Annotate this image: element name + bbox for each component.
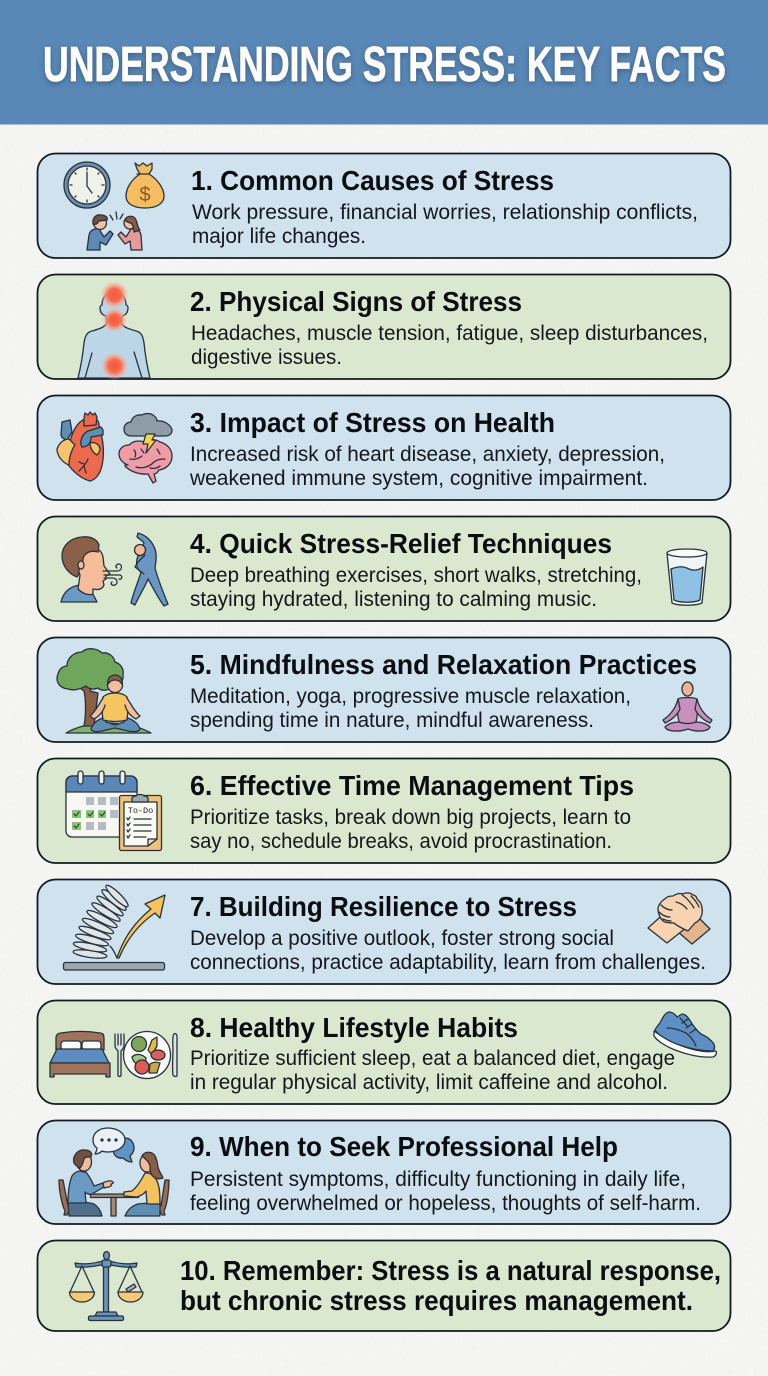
icon: spring and rising arrow	[64, 883, 165, 970]
header banner	[0, 0, 768, 124]
panel 4: quick relief	[38, 516, 730, 621]
text 8	[190, 1046, 675, 1094]
icon: running shoe	[654, 1012, 716, 1057]
heading 3: 3. Impact of Stress on Health	[190, 407, 555, 438]
panel 10: remember	[38, 1240, 730, 1331]
icon: clasped hands	[648, 893, 710, 944]
icon: person meditating under tree	[57, 649, 151, 733]
text 6: Prioritize tasks, break down big projects, learn to	[190, 805, 631, 829]
panel 7: resilience	[38, 880, 730, 984]
icon: yoga silhouette	[663, 682, 712, 731]
icon: to-do clipboard	[120, 794, 162, 850]
icon: balance scale	[70, 1252, 143, 1320]
icon: glass of water	[667, 549, 707, 605]
text 9: feeling overwhelmed or hopeless, thoughts of self-harm.	[190, 1191, 701, 1215]
icon: heart	[57, 412, 103, 481]
icon: bed	[50, 1032, 110, 1077]
heading 1: 1. Common Causes of Stress	[191, 165, 554, 196]
text 8: Prioritize sufficient sleep, eat a balanced diet, engage	[190, 1046, 675, 1070]
text 1: major life changes.	[192, 224, 366, 248]
text 5: Meditation, yoga, progressive muscle relaxation,	[190, 684, 631, 708]
icon: calendar	[66, 771, 137, 837]
text 9: Persistent symptoms, difficulty functioning in daily life,	[190, 1167, 686, 1191]
panel 3: impact on health	[38, 396, 730, 500]
panel 6: time management	[38, 758, 730, 863]
text 4	[190, 563, 642, 611]
text 3	[189, 442, 665, 490]
message: 10. Remember: Stress is a natural response,	[180, 1255, 721, 1286]
text 5	[190, 684, 631, 732]
text 1: Work pressure, financial worries, relationship conflicts,	[192, 200, 698, 224]
heading 8: 8. Healthy Lifestyle Habits	[190, 1012, 518, 1043]
panel 2: physical signs	[38, 274, 730, 380]
heading 6: 6. Effective Time Management Tips	[190, 770, 634, 801]
icon: to-do clipboard: To-Do	[128, 806, 153, 816]
icon: body with stress points	[78, 281, 150, 380]
heading 7: 7. Building Resilience to Stress	[190, 891, 577, 922]
text 2: Headaches, muscle tension, fatigue, sleep disturbances,	[191, 321, 708, 345]
text 5: spending time in nature, mindful awareness.	[190, 708, 594, 732]
text 6	[190, 805, 631, 853]
icon: man breathing out	[61, 537, 110, 602]
text 7: connections, practice adaptability, learn from challenges.	[190, 950, 706, 974]
text 8: in regular physical activity, limit caffeine and alcohol.	[190, 1070, 668, 1094]
text 9	[190, 1167, 701, 1215]
heading 2: 2. Physical Signs of Stress	[190, 286, 522, 317]
panel 1: common causes	[38, 154, 730, 258]
icon: clock, money bag and arguing couple	[64, 162, 164, 250]
text 3: weakened immune system, cognitive impairment.	[189, 466, 648, 490]
text 7: Develop a positive outlook, foster strong social	[190, 926, 614, 950]
icon: stretching figure	[131, 533, 168, 606]
message: but chronic stress requires management.	[180, 1285, 693, 1316]
panel 9: professional help	[38, 1120, 730, 1224]
text 2	[191, 321, 708, 369]
text 7	[190, 926, 706, 974]
message	[180, 1255, 721, 1316]
icon: storm cloud over brain	[119, 414, 172, 483]
icon: plate with vegetables and cutlery	[115, 1032, 177, 1078]
icon: breath swirl	[103, 564, 122, 585]
text 1	[192, 200, 698, 248]
icon: man and woman at table	[59, 1150, 169, 1216]
icon: clock, money bag and arguing couple: $	[139, 184, 151, 206]
text 4: Deep breathing exercises, short walks, stretching,	[190, 563, 642, 587]
heading 4: 4. Quick Stress-Relief Techniques	[190, 528, 612, 559]
text 2: digestive issues.	[191, 345, 342, 369]
text 3: Increased risk of heart disease, anxiety, depression,	[190, 442, 665, 466]
heading 9: 9. When to Seek Professional Help	[190, 1131, 618, 1162]
panel 8: healthy habits	[38, 1000, 730, 1104]
text 6: say no, schedule breaks, avoid procrastination.	[190, 829, 612, 853]
text 4: staying hydrated, listening to calming music.	[190, 587, 597, 611]
icon: speech bubbles	[93, 1128, 134, 1162]
heading 5: 5. Mindfulness and Relaxation Practices	[190, 649, 697, 680]
panel 5: mindfulness	[38, 638, 730, 742]
